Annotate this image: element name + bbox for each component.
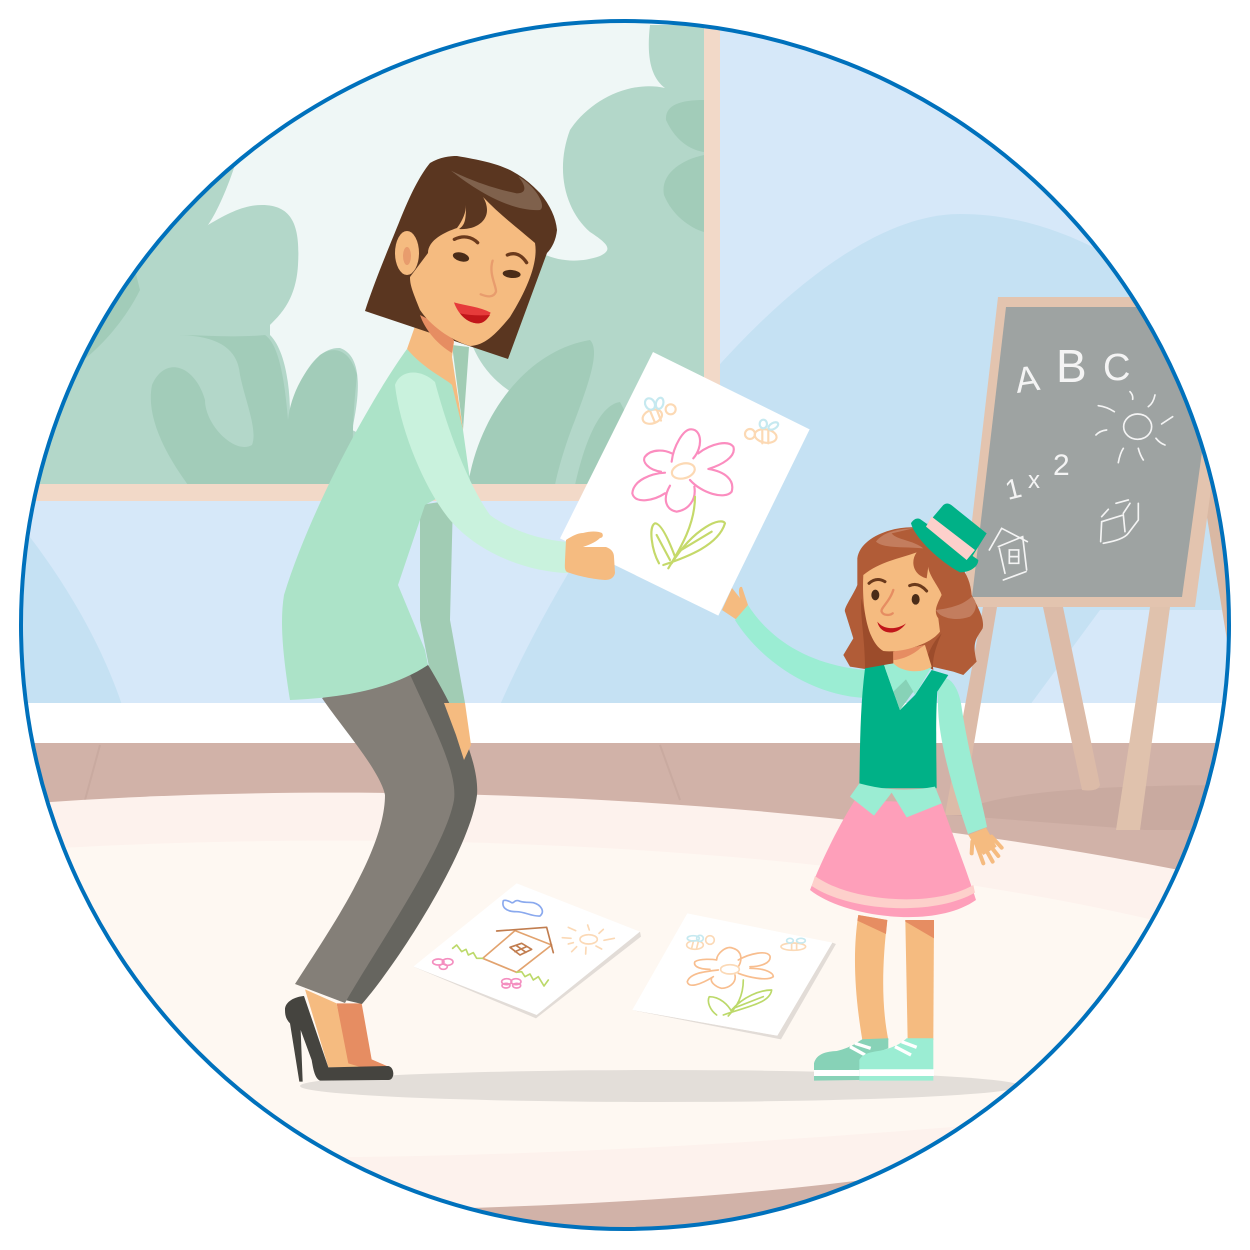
- waist: [850, 783, 942, 817]
- plants outside window: [30, 25, 704, 485]
- head, vest and hat details: [843, 503, 987, 788]
- paper held by teacher: [560, 352, 810, 616]
- trousers: [345, 660, 477, 1004]
- drawing on floor: flower: [632, 913, 836, 1039]
- skirting and floor: [0, 703, 1250, 1250]
- chalk cube: [1101, 500, 1138, 543]
- drawn flower: [632, 429, 734, 512]
- chalk writing: B: [1056, 340, 1087, 392]
- torso cardigan: [282, 349, 470, 700]
- girl: [722, 503, 1002, 1081]
- ear: [395, 231, 419, 275]
- neck: [407, 328, 463, 430]
- far arm: [420, 345, 469, 703]
- vest: [859, 665, 948, 788]
- hair highlight: [451, 171, 542, 210]
- chalk writing: x: [1028, 467, 1040, 494]
- chalk sun: [1096, 392, 1173, 463]
- hand on knee: [444, 703, 471, 760]
- hair: [843, 527, 983, 675]
- face: [863, 552, 942, 651]
- bees: [641, 404, 778, 444]
- chalk writing: C: [1103, 347, 1130, 389]
- shadow under figures: [300, 1070, 1020, 1102]
- blackboard easel: [945, 297, 1250, 830]
- teacher: [282, 156, 568, 1082]
- drawing on floor: house: [413, 883, 641, 1018]
- hair: [365, 156, 557, 359]
- skirt: [810, 800, 976, 917]
- hat: [911, 503, 987, 572]
- chalk writing: A: [1012, 357, 1042, 401]
- legs and shoes: [814, 915, 934, 1081]
- far hand: [722, 587, 748, 620]
- eyes brows and mouth: [452, 237, 527, 323]
- near arm: [938, 678, 987, 834]
- collar: [884, 663, 932, 695]
- chalk writing: 2: [1053, 449, 1070, 482]
- neck shade: [420, 315, 454, 353]
- facial features: [869, 580, 927, 633]
- chalk writing: [1006, 350, 1129, 500]
- window frame: [36, 28, 720, 501]
- teacher hand on paper: [565, 532, 615, 580]
- near arm: [395, 373, 568, 573]
- chalk writing: 1: [1002, 472, 1025, 506]
- face: [410, 197, 536, 346]
- shoes and legs: [285, 989, 393, 1082]
- far arm: [735, 605, 865, 698]
- near hand: [968, 828, 1002, 863]
- neck: [893, 645, 932, 671]
- chalk house: [989, 528, 1027, 580]
- background wall and window: [0, 0, 1250, 710]
